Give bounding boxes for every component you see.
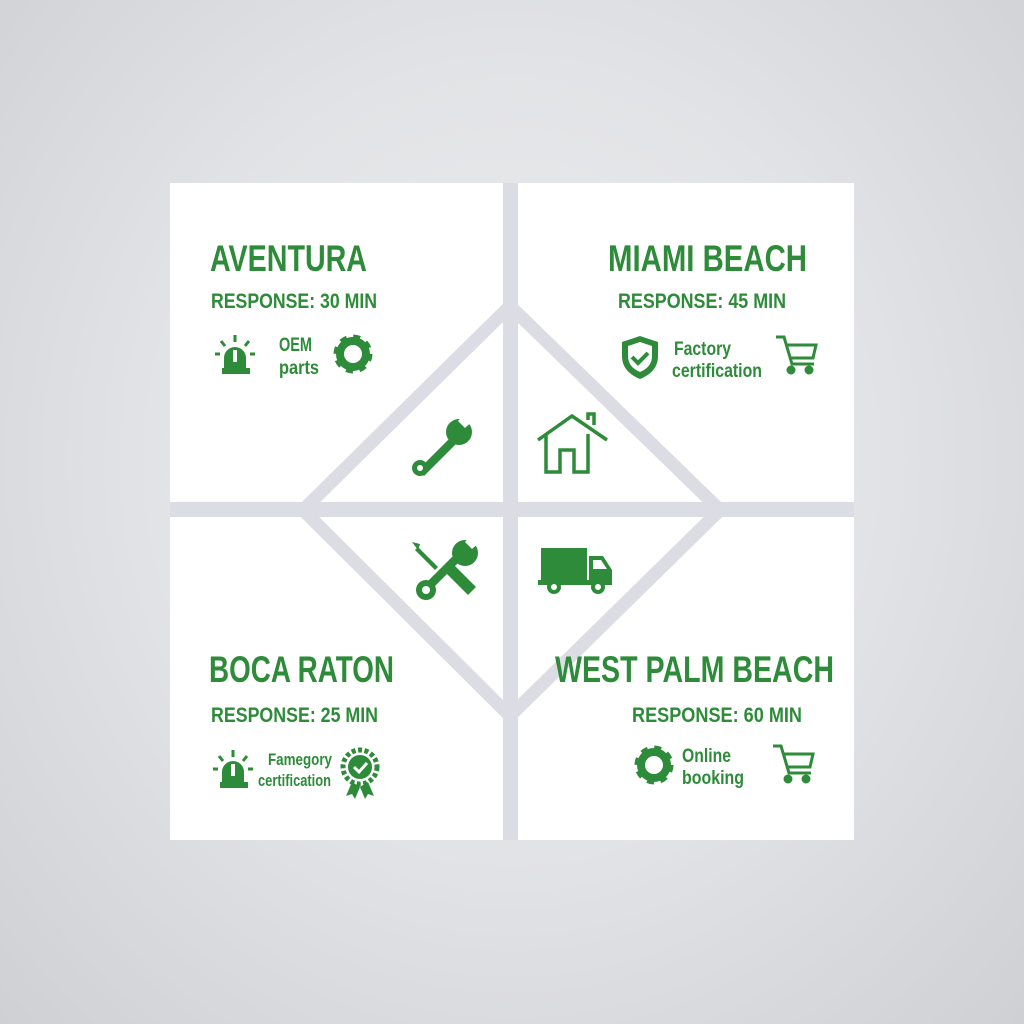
heading: west palm beach: WEST PALM BEACH: [555, 649, 834, 690]
heading: boca raton: BOCA RATON: [209, 649, 394, 690]
text: OEM parts: [279, 335, 319, 379]
icon: house: [538, 414, 607, 472]
heading: boca raton: [209, 649, 394, 727]
icon: siren: [215, 335, 255, 374]
text: online booking: Online: [682, 746, 731, 767]
text: factory certification: certification: [672, 361, 762, 382]
text: OEM parts: OEM: [279, 335, 312, 356]
heading: west palm beach: [555, 649, 834, 727]
icon: cart 2: [773, 746, 813, 782]
heading: boca raton: RESPONSE: 25 MIN: [211, 704, 378, 727]
icon: shield: [622, 336, 658, 379]
text: OEM parts: parts: [279, 358, 319, 379]
icon: wrench: [412, 412, 474, 476]
heading: aventura: AVENTURA: [210, 238, 367, 279]
heading: miami beach: MIAMI BEACH: [608, 238, 807, 279]
diamond connector: [303, 306, 720, 716]
text: online booking: booking: [682, 768, 744, 789]
icon: cart: [776, 337, 816, 373]
text: famegory certification: certification: [258, 771, 331, 790]
panel: miami beach: [518, 183, 854, 502]
text: famegory certification: [258, 750, 332, 790]
panel: aventura: [170, 183, 503, 502]
icon: gear: [338, 339, 368, 369]
heading: miami beach: RESPONSE: 45 MIN: [618, 290, 786, 313]
icon: award badge: [343, 750, 377, 799]
heading: aventura: RESPONSE: 30 MIN: [211, 290, 377, 313]
text: online booking: [682, 746, 744, 789]
center cross gaps: [170, 183, 854, 840]
icon: tools: [412, 533, 481, 600]
icon: truck: [538, 548, 612, 594]
heading: west palm beach: RESPONSE: 60 MIN: [632, 704, 802, 727]
icon: gear 2: [639, 750, 669, 780]
heading: miami beach: [608, 238, 807, 313]
heading: aventura: [210, 238, 377, 313]
panel: west palm beach: [518, 517, 854, 840]
text: famegory certification: Famegory: [268, 750, 332, 769]
icon: siren 2: [213, 750, 253, 788]
panel: boca raton: [170, 517, 503, 840]
text: factory certification: [672, 339, 762, 382]
text: factory certification: Factory: [674, 339, 731, 360]
